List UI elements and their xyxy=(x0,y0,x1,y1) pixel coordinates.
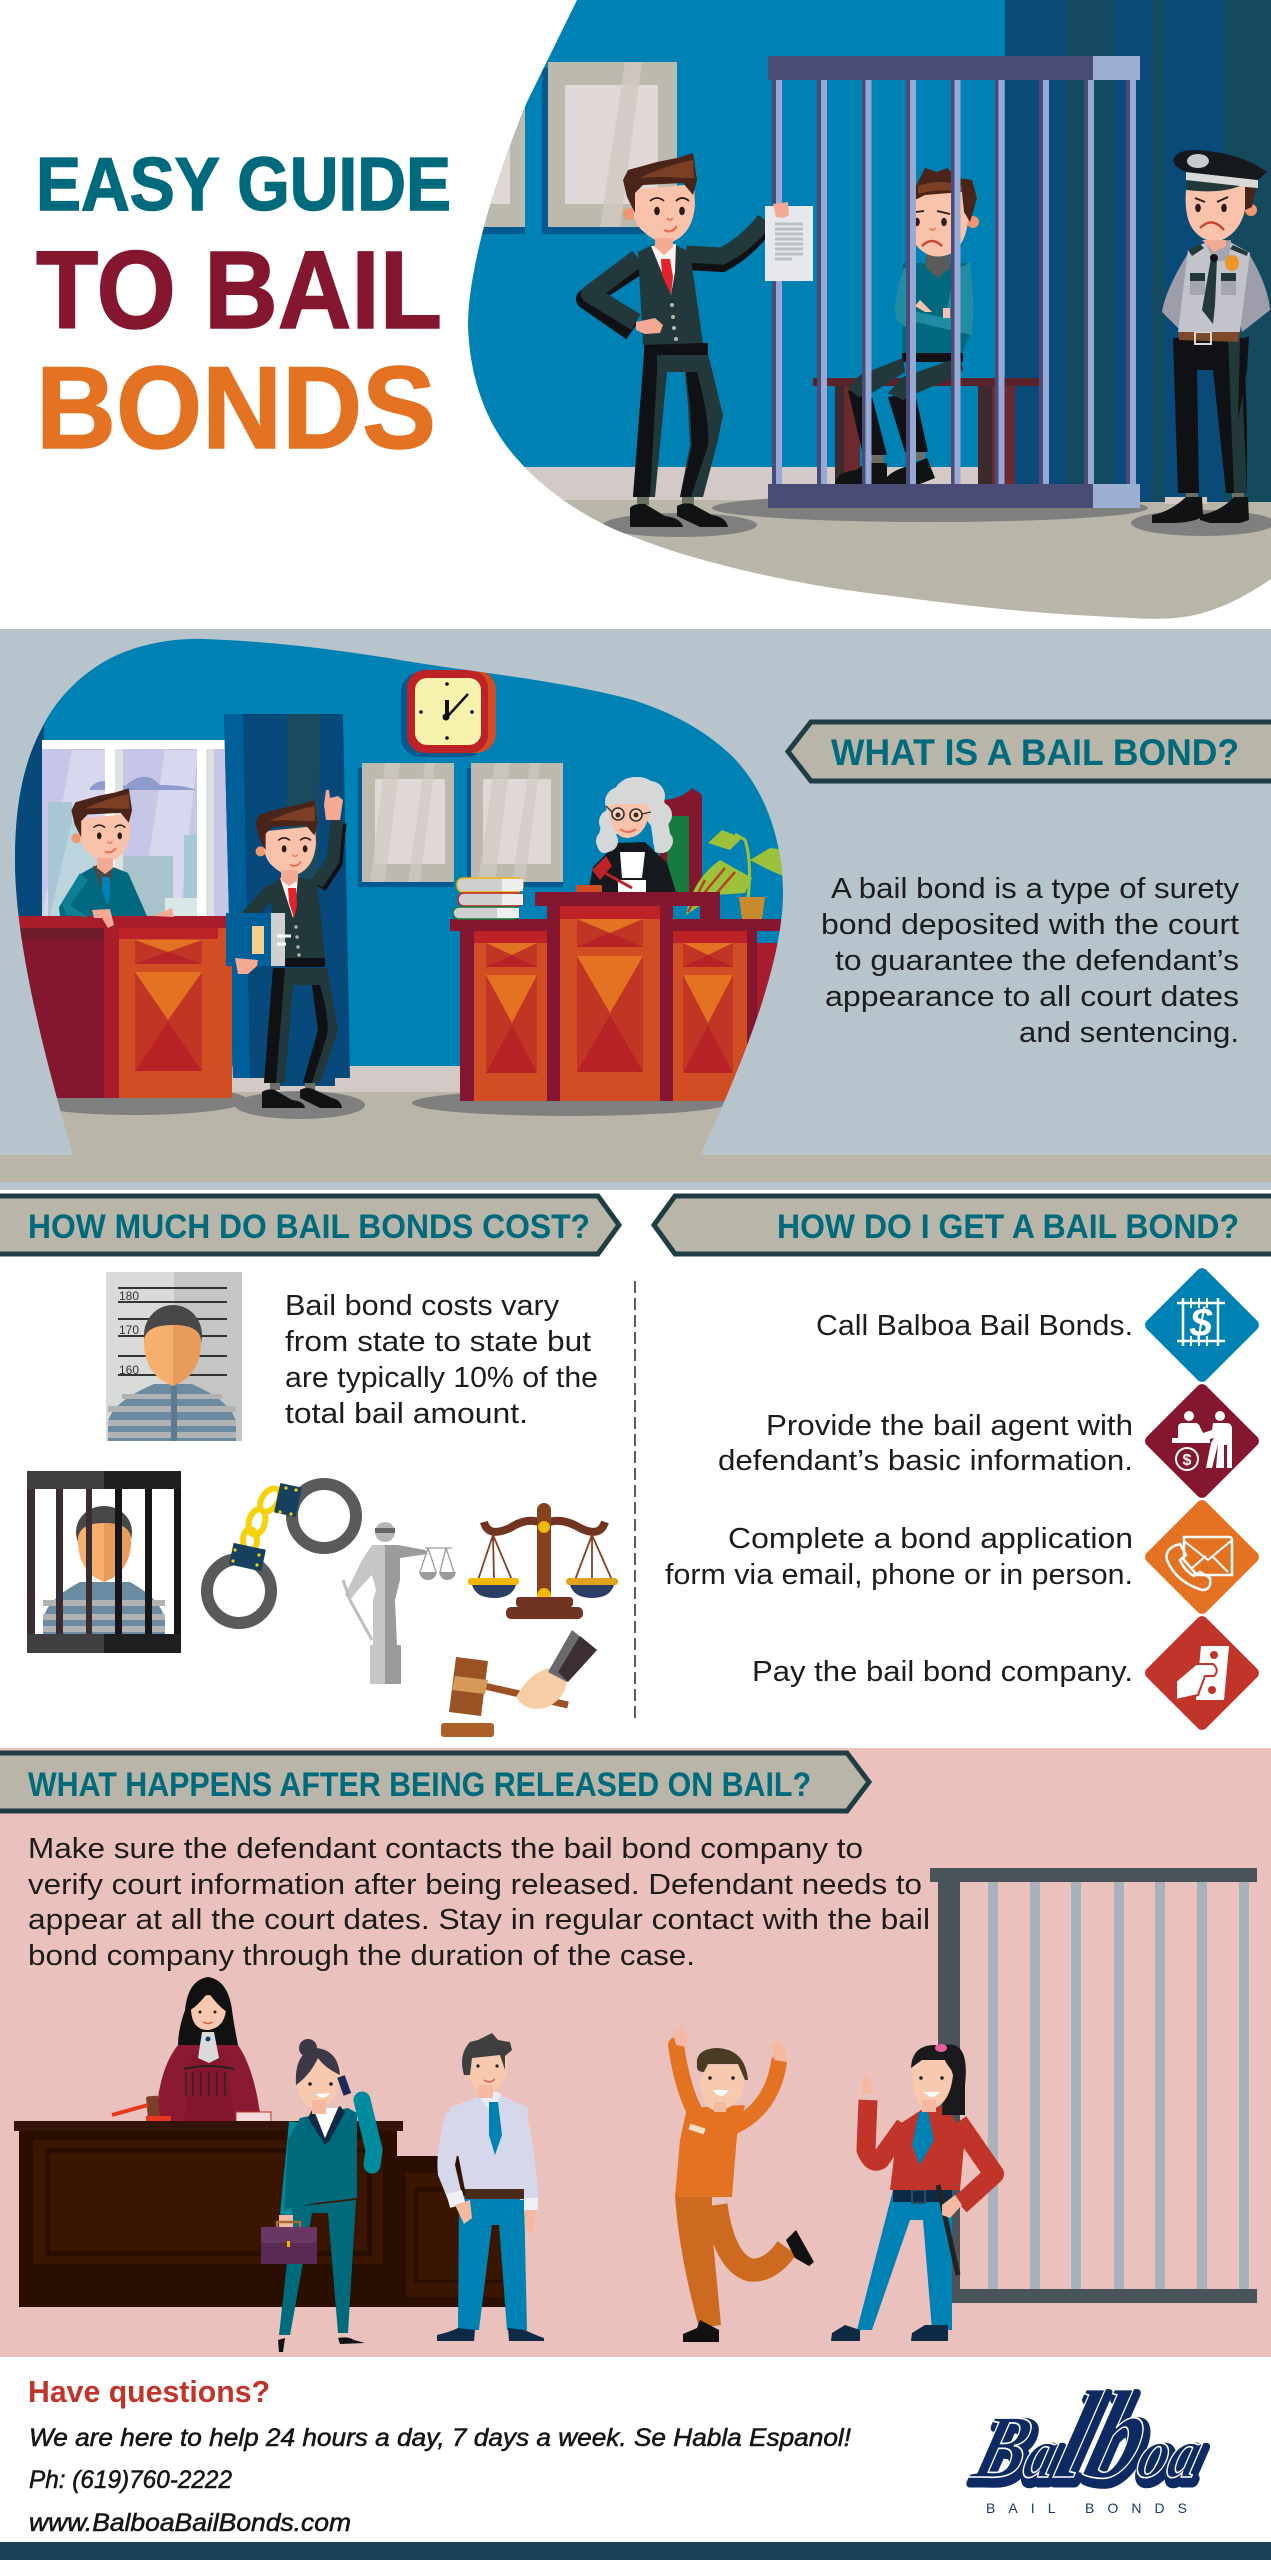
icon: mugshot: 170 xyxy=(119,1323,139,1337)
text: after release: appear at all the court dates. Stay in regular contact with the bail xyxy=(28,1904,930,1936)
panel: how much and how to xyxy=(0,1190,1271,1748)
judge xyxy=(576,777,676,892)
text: cost: total bail amount. xyxy=(285,1398,528,1430)
step 2 xyxy=(718,1382,1261,1500)
wall frames xyxy=(482,62,677,234)
text: what is a bail bond: and sentencing. xyxy=(1019,1017,1239,1049)
text: what is a bail bond: bond deposited with the court xyxy=(821,909,1239,941)
steps list xyxy=(665,1266,1261,1732)
police officer xyxy=(1152,150,1270,523)
lawyer with document xyxy=(586,153,813,527)
title: BONDS xyxy=(36,342,436,473)
panel: after release xyxy=(0,1748,1271,2357)
title xyxy=(36,142,451,473)
logo: BAIL BONDS xyxy=(986,2500,1187,2516)
curtain xyxy=(224,714,350,1086)
footer band xyxy=(0,2542,1271,2560)
ribbon: after release: WHAT HAPPENS AFTER BEING RELEASED ON BAIL? xyxy=(28,1766,811,1804)
judge bench xyxy=(450,892,787,1101)
logo: Balboa xyxy=(961,2364,1227,2504)
wall frames xyxy=(358,763,563,887)
icon: handcuffs xyxy=(207,1483,356,1623)
text: what is a bail bond: to guarantee the defendant’s xyxy=(835,945,1239,977)
contact text: Ph: (619)760-2222 xyxy=(29,2466,232,2494)
text: what is a bail bond: A bail bond is a type of surety xyxy=(831,873,1240,905)
title: TO BAIL xyxy=(36,229,442,352)
heading: have questions: Have questions? xyxy=(28,2374,270,2409)
illustration: courtroom xyxy=(0,630,800,1162)
text: after release: verify court information after being released. Defendant needs to xyxy=(28,1869,922,1901)
step 4: Pay the bail bond company. xyxy=(752,1656,1133,1688)
step 3: Complete a bond application xyxy=(728,1523,1133,1555)
text: what is a bail bond xyxy=(821,873,1240,1049)
man with blue tie xyxy=(437,2033,544,2341)
desk: clerk xyxy=(18,916,232,1098)
ribbon: cost xyxy=(0,1196,619,1254)
clock xyxy=(401,670,496,757)
ribbon: cost: HOW MUCH DO BAIL BONDS COST? xyxy=(28,1208,590,1246)
judge chair xyxy=(660,788,702,892)
shadows xyxy=(603,498,1271,537)
text: after release: Make sure the defendant contacts the bail bond company to xyxy=(28,1833,863,1865)
icon: mugshot xyxy=(106,1272,242,1441)
step 2: defendant’s basic information. xyxy=(718,1445,1133,1477)
ribbon: what is a bail bond xyxy=(788,722,1271,781)
bench xyxy=(813,378,1039,485)
icon: mugshot: 160 xyxy=(119,1363,139,1377)
step 1 xyxy=(816,1266,1261,1384)
step 3 xyxy=(665,1498,1261,1616)
panel: what is a bail bond xyxy=(0,629,1271,1190)
step 2: Provide the bail agent with xyxy=(766,1410,1133,1442)
ribbon: how to get xyxy=(654,1196,1271,1254)
text: cost: are typically 10% of the xyxy=(285,1362,598,1394)
curtain xyxy=(1005,0,1271,502)
text: after release: bond company through the duration of the case. xyxy=(28,1940,695,1972)
text: cost xyxy=(285,1290,598,1430)
icon: scales xyxy=(468,1503,618,1619)
divider xyxy=(634,1281,636,1722)
contact text: We are here to help 24 hours a day, 7 days a week. Se Habla Espanol! xyxy=(29,2424,851,2452)
icon: prisoner behind bars xyxy=(27,1471,181,1653)
text: after release xyxy=(28,1833,930,1972)
contact text xyxy=(29,2424,851,2537)
illustration: jail scene xyxy=(460,0,1271,630)
female judge xyxy=(112,1977,271,2122)
court desk xyxy=(14,2121,506,2307)
prisoner xyxy=(835,168,979,484)
happy man in orange xyxy=(672,2023,814,2342)
icon: lady justice xyxy=(343,1522,456,1684)
books xyxy=(453,878,523,919)
step 4 xyxy=(752,1614,1261,1732)
clerk xyxy=(59,788,174,928)
step 1: $ xyxy=(1189,1301,1213,1345)
ribbon: after release xyxy=(0,1753,869,1811)
step 1: Call Balboa Bail Bonds. xyxy=(816,1310,1133,1342)
window xyxy=(42,740,230,916)
lawyer with folder xyxy=(226,790,343,1108)
text: cost: Bail bond costs vary xyxy=(285,1290,560,1322)
jail door xyxy=(930,1868,1257,2303)
contact text: www.BalboaBailBonds.com xyxy=(29,2509,351,2537)
woman on phone xyxy=(261,2039,374,2352)
ribbon: what is a bail bond: WHAT IS A BAIL BOND? xyxy=(831,732,1239,773)
step 3: form via email, phone or in person. xyxy=(665,1559,1133,1591)
icon: mugshot: 180 xyxy=(119,1289,139,1303)
step 2: $ xyxy=(1183,1452,1192,1469)
ribbon: how to get: HOW DO I GET A BAIL BOND? xyxy=(777,1208,1239,1246)
text: cost: from state to state but xyxy=(285,1326,591,1358)
text: what is a bail bond: appearance to all court dates xyxy=(825,981,1239,1013)
icon: gavel and hand xyxy=(441,1630,597,1737)
logo: Balboa xyxy=(963,2369,1229,2509)
female officer xyxy=(831,2044,994,2341)
title: EASY GUIDE xyxy=(36,142,451,226)
footer contact xyxy=(28,2374,851,2537)
cage xyxy=(768,56,1140,508)
shadows xyxy=(23,1085,728,1119)
plant xyxy=(686,830,785,919)
